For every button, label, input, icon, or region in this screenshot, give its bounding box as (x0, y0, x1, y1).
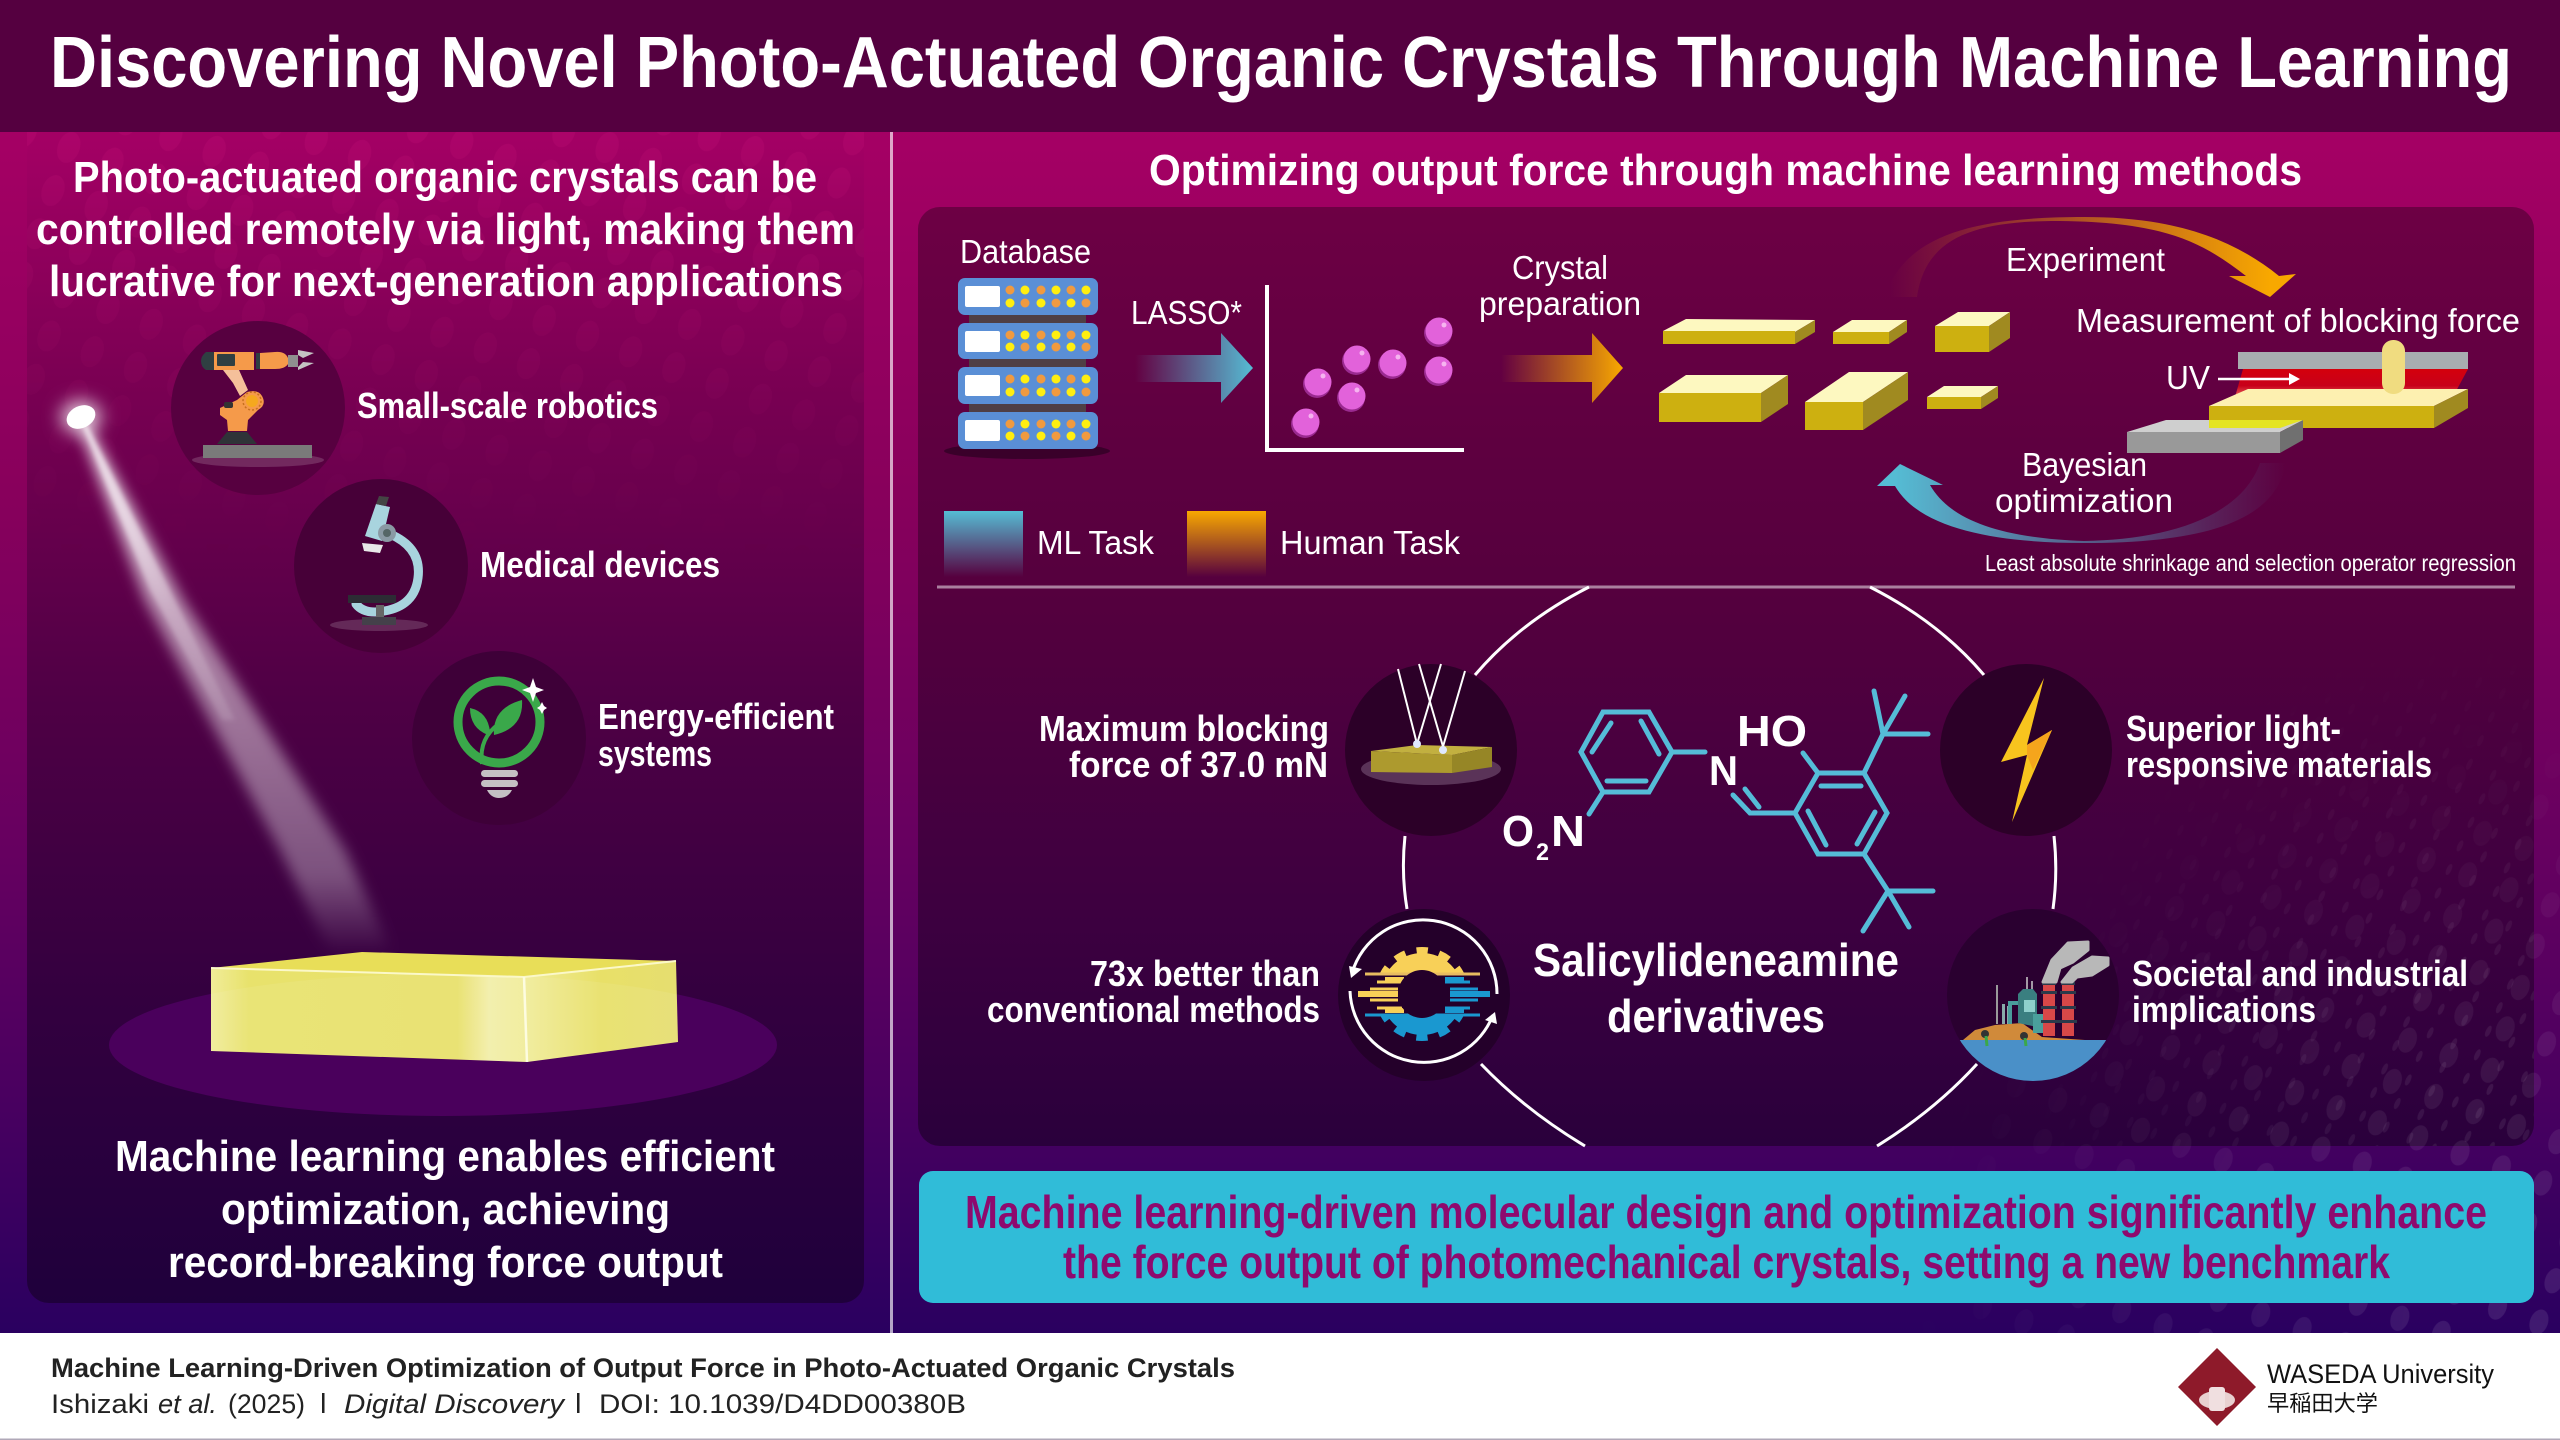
chart: scatter plot (1267, 285, 1464, 450)
callout: key conclusion (919, 1171, 2534, 1303)
crystals: six yellow blocks (1659, 312, 2010, 430)
illustration: blocking force measurement (2127, 340, 2468, 453)
logo: Waseda University: WASEDA University (2267, 1359, 2494, 1389)
text: 73x better (987, 953, 1320, 1030)
label: energy-efficient systems: systems (598, 733, 712, 774)
label: energy-efficient systems (598, 696, 834, 774)
label: measurement of blocking force: Measurement of blocking force (2076, 302, 2520, 339)
label: UV with arrow: UV (2166, 359, 2210, 396)
text: superior materials: Superior light- (2126, 708, 2341, 749)
arrow: experiment curve (1884, 217, 2296, 297)
text: maximum blocking force (1039, 708, 1329, 785)
text: societal implications: Societal and industrial (2132, 953, 2468, 994)
label: crystal preparation (1479, 249, 1641, 322)
heading: optimizing output force: Optimizing output force through machine learning methods (1149, 146, 2302, 195)
citation: authors and journal: Digital Discovery (344, 1389, 566, 1419)
section divider (937, 586, 2515, 588)
label: LASSO: LASSO* (1131, 294, 1242, 331)
title banner (0, 0, 2560, 132)
arrow: Bayesian optimization curve (1877, 463, 2286, 543)
text: machine learning result: Machine learning enables efficient (115, 1132, 775, 1181)
text: salicylideneamine derivatives: derivatives (1607, 990, 1825, 1042)
icon: microscope (294, 479, 468, 653)
ring connecting results (1403, 587, 2056, 1146)
label: database: Database (960, 233, 1091, 270)
heading: photo-actuated crystals: controlled remotely via light, making them (36, 205, 855, 254)
platform ellipse (109, 974, 777, 1116)
label: crystal preparation: Crystal (1512, 249, 1608, 286)
label: medical devices: Medical devices (480, 544, 720, 585)
arrow: human task to crystals (1501, 333, 1623, 403)
label: UV with arrow (2166, 359, 2300, 396)
text: 73x better: conventional methods (987, 989, 1320, 1030)
icon: industrial city island (1945, 909, 2121, 1085)
divider between columns (890, 132, 893, 1333)
text: machine learning result (115, 1132, 775, 1287)
label: small-scale robotics: Small-scale robotics (357, 385, 658, 426)
citation: authors and journal: Ishizaki (51, 1389, 149, 1419)
text: 73x better: 73x better than (1090, 953, 1320, 994)
text: salicylideneamine derivatives: Salicylideneamine (1533, 934, 1899, 986)
citation: authors and journal (51, 1389, 966, 1419)
label: crystal preparation: preparation (1479, 285, 1641, 322)
citation: paper title: Machine Learning-Driven Optimization of Output Force in Photo-Actuated Organic Crystals (51, 1353, 1235, 1383)
molecule: salicylideneamine structure (1502, 691, 1933, 931)
legend: ML and human tasks: Human Task (1280, 524, 1460, 561)
label: energy-efficient systems: Energy-efficient (598, 696, 834, 737)
text: machine learning result: record-breaking force output (168, 1238, 723, 1287)
legend: ML and human tasks: ML Task (1037, 524, 1154, 561)
heading: photo-actuated crystals: lucrative for next-generation applications (49, 257, 843, 306)
arrow: ML task to chart (1135, 333, 1253, 403)
molecule: salicylideneamine structure: HO (1737, 707, 1807, 756)
citation: authors and journal: DOI: 10.1039/D4DD00380B (599, 1389, 966, 1419)
text: societal implications: implications (2132, 989, 2316, 1030)
icon: green light bulb (412, 651, 586, 825)
heading: photo-actuated crystals (36, 153, 855, 306)
citation: authors and journal: (2025) (228, 1389, 305, 1419)
molecule: salicylideneamine structure: N (1551, 807, 1585, 856)
panel: left applications and crystal (27, 132, 864, 1303)
heading: photo-actuated crystals: Photo-actuated organic crystals can be (73, 153, 817, 202)
panel: right workflow and results (918, 207, 2534, 1146)
text: machine learning result: optimization, achieving (221, 1185, 670, 1234)
light beam (61, 401, 392, 952)
text: superior materials: responsive materials (2126, 744, 2432, 785)
text: superior materials (2126, 708, 2432, 785)
molecule: salicylideneamine structure: 2 (1536, 839, 1549, 866)
icon: database servers (944, 278, 1110, 459)
text: societal implications (2132, 953, 2468, 1030)
citation: authors and journal: et al. (158, 1389, 217, 1419)
text: maximum blocking force: force of 37.0 mN (1069, 744, 1328, 785)
footer (0, 1333, 2560, 1440)
icon: lightning bolt (1940, 664, 2112, 836)
label: experiment: Experiment (2006, 241, 2165, 278)
icon: robotic arm (171, 321, 345, 495)
label: Bayesian optimization (1995, 446, 2173, 519)
icon: gear with circuit lines (1338, 909, 1510, 1081)
text: salicylideneamine derivatives (1533, 934, 1899, 1042)
molecule: salicylideneamine structure: O (1502, 807, 1534, 856)
label: Bayesian optimization: Bayesian (2022, 446, 2147, 483)
molecule: salicylideneamine structure: N (1709, 747, 1738, 794)
legend: ML and human tasks (944, 511, 1460, 577)
logo: Waseda University (2178, 1348, 2494, 1426)
illustration: glowing yellow crystal (210, 952, 678, 1062)
logo: Waseda University: 早稲田大学 (2267, 1391, 2378, 1416)
label: Bayesian optimization: optimization (1995, 482, 2173, 519)
icon: crystal under light (1345, 664, 1517, 836)
text: maximum blocking force: Maximum blocking (1039, 708, 1329, 749)
halftone background pattern (2081, 892, 2560, 1333)
